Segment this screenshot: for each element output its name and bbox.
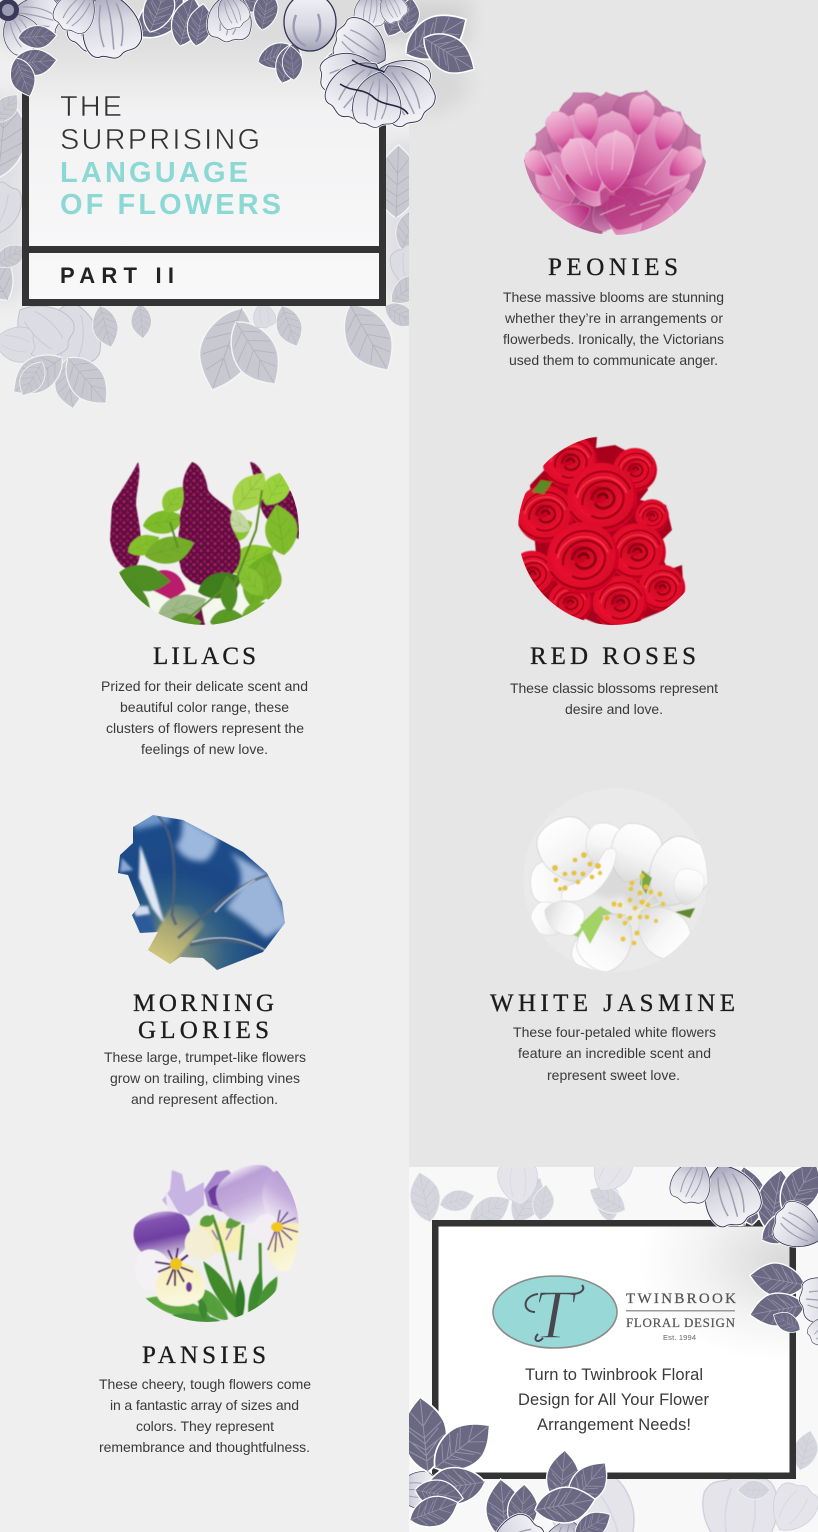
- peonies description: [503, 289, 724, 368]
- white jasmine description: feature an incredible scent and: [518, 1045, 711, 1061]
- call to action panel: [395, 1144, 818, 1532]
- white jasmine description: These four-petaled white flowers: [513, 1024, 716, 1040]
- pansies description: [99, 1376, 311, 1455]
- white jasmine heading: WHITE JASMINE: [490, 990, 735, 1017]
- pale disc: [523, 788, 707, 972]
- large petals centre-left: [61, 0, 137, 62]
- panel fill: [22, 0, 386, 306]
- morning glories heading: [133, 990, 274, 1044]
- logo oval: [493, 1276, 617, 1348]
- white jasmine description: [513, 1024, 716, 1083]
- shadow behind top flowers: [0, 0, 470, 113]
- back leaves: [127, 472, 298, 606]
- right bloom: [215, 1164, 299, 1272]
- title: SURPRISING: [60, 124, 260, 156]
- pale foliage: [405, 1144, 818, 1532]
- logo: Est. 1994: [663, 1333, 696, 1342]
- title: OF FLOWERS: [60, 189, 281, 221]
- lilacs description: clusters of flowers represent the: [106, 720, 304, 736]
- logo monogram: [524, 1284, 584, 1342]
- peonies description: flowerbeds. Ironically, the Victorians: [503, 331, 724, 347]
- lilacs image: [105, 462, 301, 635]
- pansies image: [132, 1164, 299, 1322]
- red roses description: desire and love.: [565, 701, 663, 717]
- panel borders: [22, 68, 386, 306]
- stamens left: [552, 852, 602, 891]
- peonies heading: PEONIES: [548, 254, 678, 281]
- front petal of left flower: [561, 848, 616, 901]
- back purple blooms: [162, 1170, 204, 1216]
- peonies description: These massive blooms are stunning: [503, 289, 724, 305]
- call to action text: Turn to Twinbrook Floral: [525, 1366, 703, 1384]
- top flower: [353, 0, 388, 30]
- left flower: [38, 0, 90, 31]
- title: [60, 91, 281, 221]
- cream back bloom: [197, 1222, 244, 1254]
- lower petals: [570, 196, 612, 234]
- pansies description: colors. They represent: [136, 1418, 274, 1434]
- call to action text: Design for All Your Flower: [518, 1391, 710, 1409]
- right strip: [386, 138, 409, 298]
- lower pale flower and leaves: [58, 306, 101, 362]
- lilacs heading: LILACS: [153, 643, 256, 670]
- white jasmine image: [531, 818, 707, 972]
- petal streaks: [540, 130, 690, 215]
- morning glories heading: MORNING: [133, 990, 274, 1017]
- back shading: [596, 868, 667, 909]
- dark flowers bottom left: [395, 1395, 618, 1532]
- white jasmine description: represent sweet love.: [547, 1067, 680, 1083]
- red roses description: These classic blossoms represent: [510, 680, 718, 696]
- morning glories image: [118, 815, 285, 970]
- red roses description: [510, 680, 718, 717]
- pale foliage behind header: [0, 88, 435, 415]
- pansies description: in a fantastic array of sizes and: [110, 1397, 299, 1413]
- logo monogram: T: [534, 1277, 578, 1354]
- title: THE: [60, 91, 122, 123]
- call to action text: Arrangement Needs!: [537, 1416, 691, 1434]
- red roses image: [509, 435, 685, 630]
- logo wordmark: TWINBROOK: [626, 1291, 736, 1307]
- main cluster: [178, 462, 241, 586]
- back clusters: [250, 462, 300, 540]
- panel background: [409, 1167, 818, 1532]
- pansies description: These cheery, tough flowers come: [99, 1376, 311, 1392]
- large right flower: [325, 11, 397, 81]
- left bloom: [132, 1210, 215, 1308]
- bud with sepals: [254, 37, 303, 74]
- pale gaps: [135, 578, 275, 622]
- pansies heading: PANSIES: [142, 1342, 266, 1369]
- logo: FLORAL DESIGN: [626, 1315, 736, 1330]
- dark flowers top right: [666, 1153, 818, 1355]
- stamens right: [616, 878, 660, 938]
- morning glories description: grow on trailing, climbing vines: [110, 1070, 300, 1086]
- peonies description: used them to communicate anger.: [509, 352, 718, 368]
- right leaves: [321, 46, 372, 79]
- background: right column: [409, 0, 818, 1532]
- peonies image: [524, 90, 706, 235]
- petals centre: [204, 0, 257, 46]
- stems: [170, 490, 262, 625]
- lilacs description: [101, 678, 308, 757]
- background: left column: [0, 0, 409, 1532]
- leaves behind: [126, 0, 196, 50]
- frame: [435, 1223, 793, 1476]
- green centre: [573, 906, 613, 938]
- morning glories description: These large, trumpet-like flowers: [104, 1049, 306, 1065]
- subtitle: PART II: [60, 263, 174, 288]
- ribs: [158, 816, 268, 950]
- morning glories heading: GLORIES: [138, 1017, 269, 1044]
- central light petal: [560, 130, 634, 193]
- morning glories description: and represent affection.: [131, 1091, 278, 1107]
- red roses heading: RED ROSES: [530, 643, 696, 670]
- call to action text: [518, 1366, 710, 1434]
- logo: [493, 1276, 736, 1354]
- green sepals: [580, 912, 604, 944]
- title: LANGUAGE: [60, 157, 248, 189]
- lilacs description: Prized for their delicate scent and: [101, 678, 308, 694]
- pale blue patches: [132, 815, 285, 941]
- header panel: [22, 0, 386, 306]
- peonies description: whether they’re in arrangements or: [504, 310, 723, 326]
- dark flower garland at top: [0, 0, 483, 134]
- lilacs description: beautiful color range, these: [120, 699, 289, 715]
- small upper petals: [524, 94, 704, 177]
- pansies description: remembrance and thoughtfulness.: [99, 1439, 310, 1455]
- left strip: [0, 95, 22, 300]
- morning glories description: [104, 1049, 306, 1107]
- stems and leaves: [146, 1214, 278, 1322]
- front leaves: [119, 536, 266, 625]
- lilacs description: feelings of new love.: [141, 741, 268, 757]
